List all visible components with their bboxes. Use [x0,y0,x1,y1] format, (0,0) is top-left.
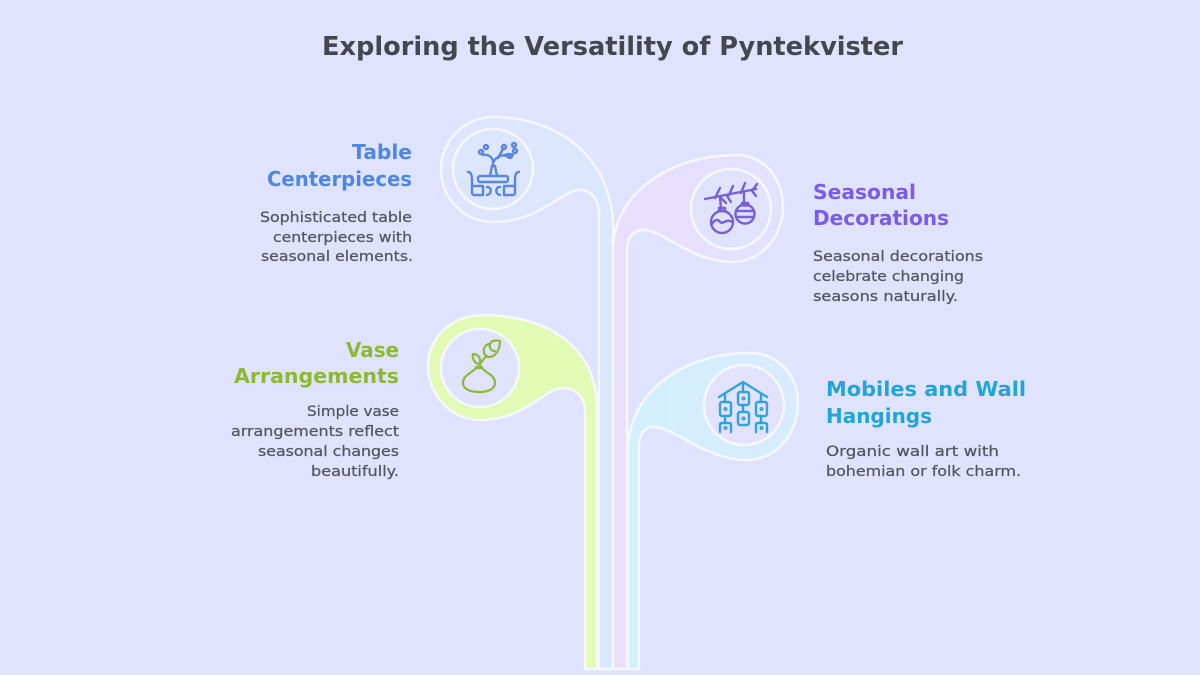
icon circle: seasonal decorations [691,169,771,249]
text: seasonal decorations description [813,249,983,305]
heading: mobiles and wall hangings: Hangings [826,404,932,428]
stem: table centerpieces [441,117,613,669]
text: vase arrangements description: Simple vase [307,404,399,420]
icon: vase with leaves [463,340,500,392]
heading: vase arrangements: Arrangements [234,364,399,388]
panel: seasonal decorations [613,155,783,669]
text: mobiles and wall hangings description: Organic wall art with [826,444,999,460]
panel: table centerpieces [441,117,613,669]
heading: seasonal decorations [813,180,949,230]
text: mobiles and wall hangings description: bohemian or folk charm. [826,464,1021,480]
title: Exploring the Versatility of Pyntekvister [322,32,903,62]
heading: mobiles and wall hangings [826,377,1026,428]
icon: branch with ornaments [705,183,757,233]
icon circle: table centerpieces [453,129,533,209]
text: seasonal decorations description: seasons naturally. [813,289,958,305]
text: seasonal decorations description: Seasonal decorations [813,249,983,265]
panel: mobiles and wall hangings [628,353,798,669]
heading: vase arrangements: Vase [346,338,399,362]
icon: wall hanging mobile [719,382,767,432]
text: vase arrangements description [231,404,399,480]
heading: vase arrangements [234,338,399,388]
text: seasonal decorations description: celebrate changing [813,269,964,285]
icon circle: mobiles and wall hangings [704,365,784,445]
stem: vase arrangements [428,315,597,669]
heading: mobiles and wall hangings: Mobiles and Wall [826,377,1026,401]
text: vase arrangements description: beautifully. [311,464,399,480]
text: vase arrangements description: seasonal changes [258,444,399,460]
icon: table with branch centerpiece [468,143,519,195]
text: table centerpieces description: seasonal elements. [261,249,413,265]
stem: seasonal decorations [613,155,783,669]
icon circle: vase arrangements [441,329,519,407]
text: mobiles and wall hangings description [826,444,1021,480]
text: table centerpieces description: centerpieces with [273,230,412,246]
heading: seasonal decorations: Decorations [813,206,949,230]
stem: mobiles and wall hangings [628,353,798,669]
heading: table centerpieces [267,140,412,191]
text: table centerpieces description [260,210,413,265]
heading: table centerpieces: Table [352,140,412,164]
heading: table centerpieces: Centerpieces [267,167,412,191]
panel: vase arrangements [428,315,597,669]
heading: seasonal decorations: Seasonal [813,180,916,204]
text: vase arrangements description: arrangements reflect [231,424,399,440]
text: table centerpieces description: Sophisticated table [260,210,412,226]
